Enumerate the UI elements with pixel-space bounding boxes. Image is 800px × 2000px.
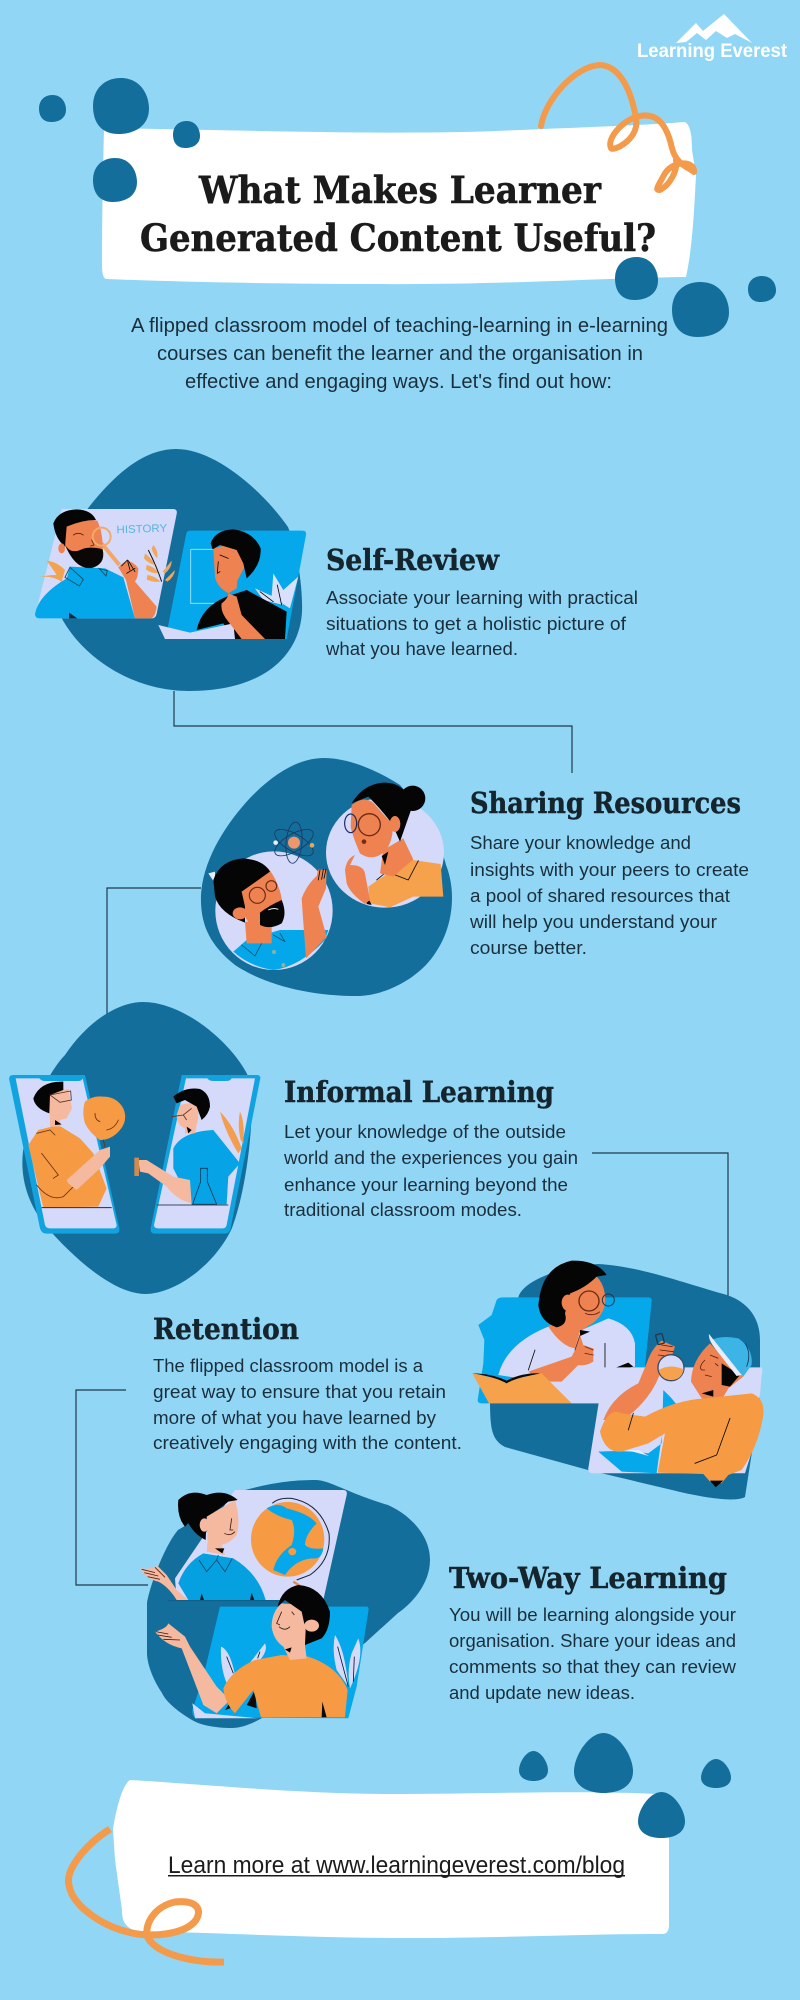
right phone bbox=[134, 1075, 260, 1234]
intro text: courses can benefit the learner and the organisation in bbox=[157, 343, 643, 365]
illustration: two-way learning people bbox=[140, 1490, 369, 1718]
body: Sharing Resources: a pool of shared resources that bbox=[470, 886, 730, 906]
intro text: effective and engaging ways. Let's find out how: bbox=[185, 371, 612, 393]
connector: self-review to sharing resources bbox=[174, 691, 572, 773]
decorative orange squiggle on footer bbox=[68, 1829, 224, 1962]
body: Retention: The flipped classroom model is a bbox=[153, 1356, 424, 1376]
connector: retention to two-way learning bbox=[76, 1390, 148, 1585]
section 2 blob bbox=[201, 758, 452, 996]
body: Sharing Resources: Share your knowledge and bbox=[470, 833, 691, 853]
body: Two-Way Learning: You will be learning alongside your bbox=[449, 1605, 736, 1625]
body: Sharing Resources: course better. bbox=[470, 938, 587, 958]
illustration: informal learning phones bbox=[9, 1075, 260, 1234]
body: Self-Review: what you have learned. bbox=[325, 639, 518, 659]
title: Generated Content Useful? bbox=[140, 216, 656, 260]
illustration: retention people bbox=[472, 1261, 763, 1487]
section 5 blob bbox=[147, 1480, 430, 1728]
section 4 blob bbox=[490, 1264, 760, 1499]
body: Sharing Resources: will help you understand your bbox=[469, 912, 717, 932]
body: Sharing Resources bbox=[469, 833, 749, 958]
body: Two-Way Learning: organisation. Share your ideas and bbox=[449, 1631, 736, 1651]
illustration: self-review people: HISTORY bbox=[116, 523, 168, 536]
footer link text: Learn more at www.learningeverest.com/blog bbox=[168, 1852, 625, 1879]
body: Retention: creatively engaging with the content. bbox=[153, 1433, 462, 1453]
body: Two-Way Learning bbox=[449, 1605, 737, 1703]
connector: sharing resources to informal learning bbox=[107, 888, 201, 1018]
body: Informal Learning: enhance your learning beyond the bbox=[284, 1175, 568, 1195]
body: Informal Learning: Let your knowledge of the outside bbox=[284, 1122, 566, 1142]
body: Retention: great way to ensure that you retain bbox=[153, 1382, 446, 1402]
decorative orange squiggle behind title banner bbox=[541, 65, 636, 126]
heading: Two-Way Learning: Two-Way Learning bbox=[449, 1561, 727, 1595]
body: Two-Way Learning: and update new ideas. bbox=[449, 1683, 635, 1703]
heading: Retention: Retention bbox=[153, 1312, 299, 1346]
title bbox=[140, 168, 656, 260]
icon: atom bbox=[271, 821, 317, 864]
body: Retention bbox=[153, 1356, 462, 1453]
body: Self-Review: situations to get a holistic picture of bbox=[326, 614, 627, 634]
section 1 blob bbox=[51, 449, 302, 691]
heading: Self-Review: Self-Review bbox=[326, 543, 500, 577]
illustration: self-review people bbox=[35, 509, 306, 639]
left phone bbox=[9, 1075, 125, 1234]
body: Retention: more of what you have learned by bbox=[153, 1408, 436, 1428]
illustration: sharing resources people bbox=[208, 783, 444, 970]
body: Sharing Resources: insights with your peers to create bbox=[470, 860, 749, 880]
intro text bbox=[131, 315, 668, 393]
intro text: A flipped classroom model of teaching-learning in e-learning bbox=[131, 315, 668, 337]
connector: informal learning to retention bbox=[592, 1153, 728, 1296]
heading: Informal Learning: Informal Learning bbox=[284, 1075, 554, 1109]
decorative blobs: bottom bbox=[519, 1733, 731, 1838]
logo: Learning Everest bbox=[637, 14, 788, 62]
decorative blobs: top bbox=[39, 78, 776, 337]
logo: Learning Everest: Learning Everest bbox=[637, 41, 788, 62]
orange loops on banner corner bbox=[610, 115, 694, 190]
body: Informal Learning: world and the experiences you gain bbox=[283, 1148, 578, 1168]
title: What Makes Learner bbox=[198, 168, 601, 212]
title banner bbox=[102, 122, 696, 284]
body: Informal Learning: traditional classroom modes. bbox=[284, 1200, 522, 1220]
section 3 blob bbox=[22, 1002, 252, 1294]
body: Two-Way Learning: comments so that they can review bbox=[449, 1657, 737, 1677]
heading: Sharing Resources: Sharing Resources bbox=[470, 786, 741, 820]
footer banner bbox=[113, 1780, 669, 1938]
body: Informal Learning bbox=[283, 1122, 578, 1220]
body: Self-Review bbox=[325, 588, 638, 659]
body: Self-Review: Associate your learning with practical bbox=[326, 588, 638, 608]
icon: globe bbox=[251, 1498, 329, 1586]
